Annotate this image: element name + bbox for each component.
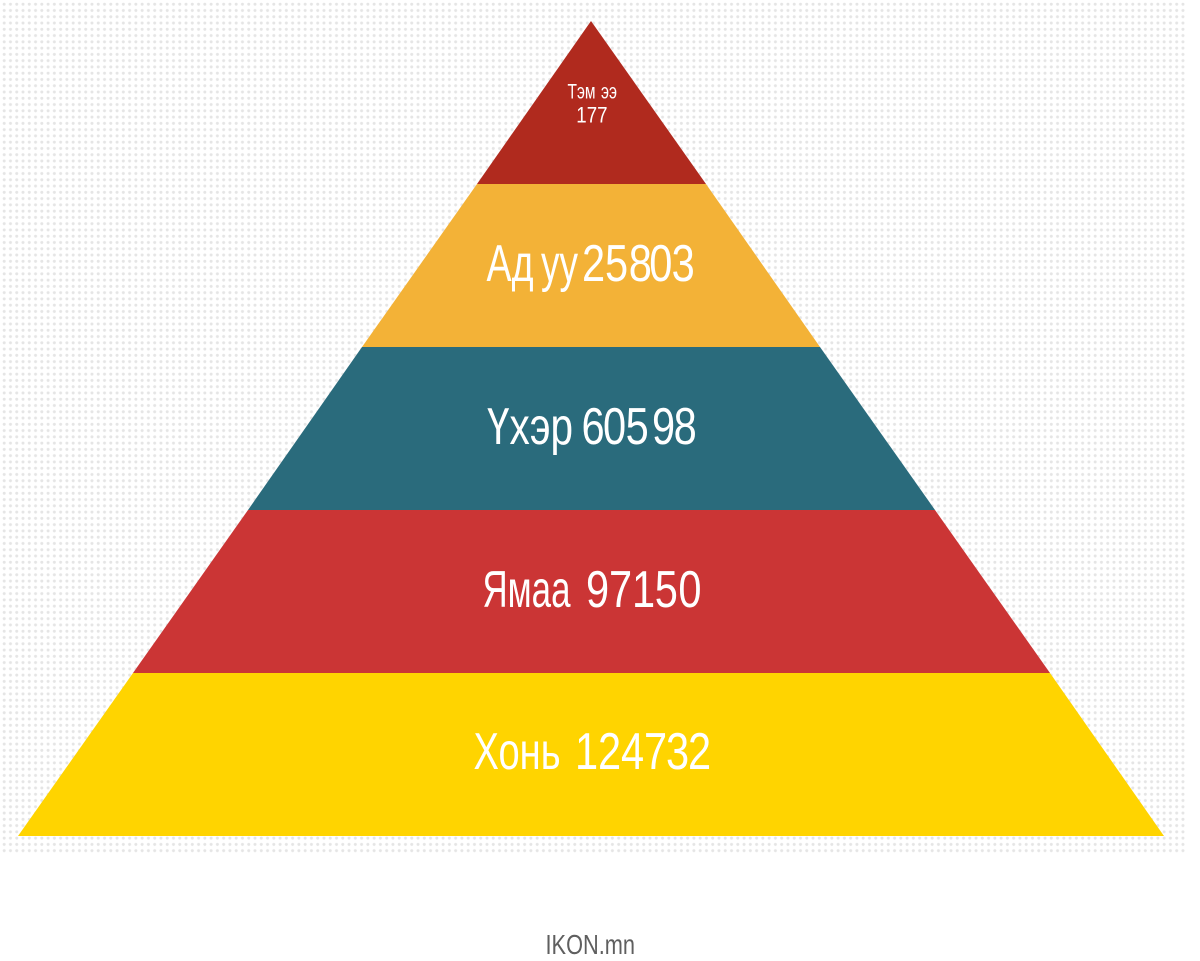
tier: Хонь 124732: Хонь	[474, 722, 561, 780]
tier: Адуу 25803	[362, 184, 820, 347]
source label: IKON.mn	[546, 929, 635, 960]
tier: Хонь 124732	[18, 673, 1164, 836]
tier: Хонь 124732: 124732	[575, 722, 711, 780]
tier: Үхэр 60598: Үхэр	[487, 397, 573, 455]
tier: Ямаа 97150	[133, 510, 1050, 673]
tier: Ямаа 97150: Ямаа	[482, 560, 571, 618]
tier: Тэмээ 177: Тэм	[568, 80, 596, 104]
tier: Адуу 25803: 25803	[582, 234, 695, 292]
tier: Тэмээ 177: 177	[576, 104, 607, 128]
tier: Үхэр 60598	[248, 347, 935, 510]
tier: Ямаа 97150: 97150	[586, 560, 702, 618]
tier: Адуу 25803: уу	[541, 234, 578, 292]
tier: Тэмээ 177	[477, 21, 706, 184]
tier: Тэмээ 177: ээ	[601, 80, 617, 104]
tier: Үхэр 60598: 60598	[582, 397, 697, 455]
tier: Адуу 25803: Ад	[486, 234, 534, 292]
